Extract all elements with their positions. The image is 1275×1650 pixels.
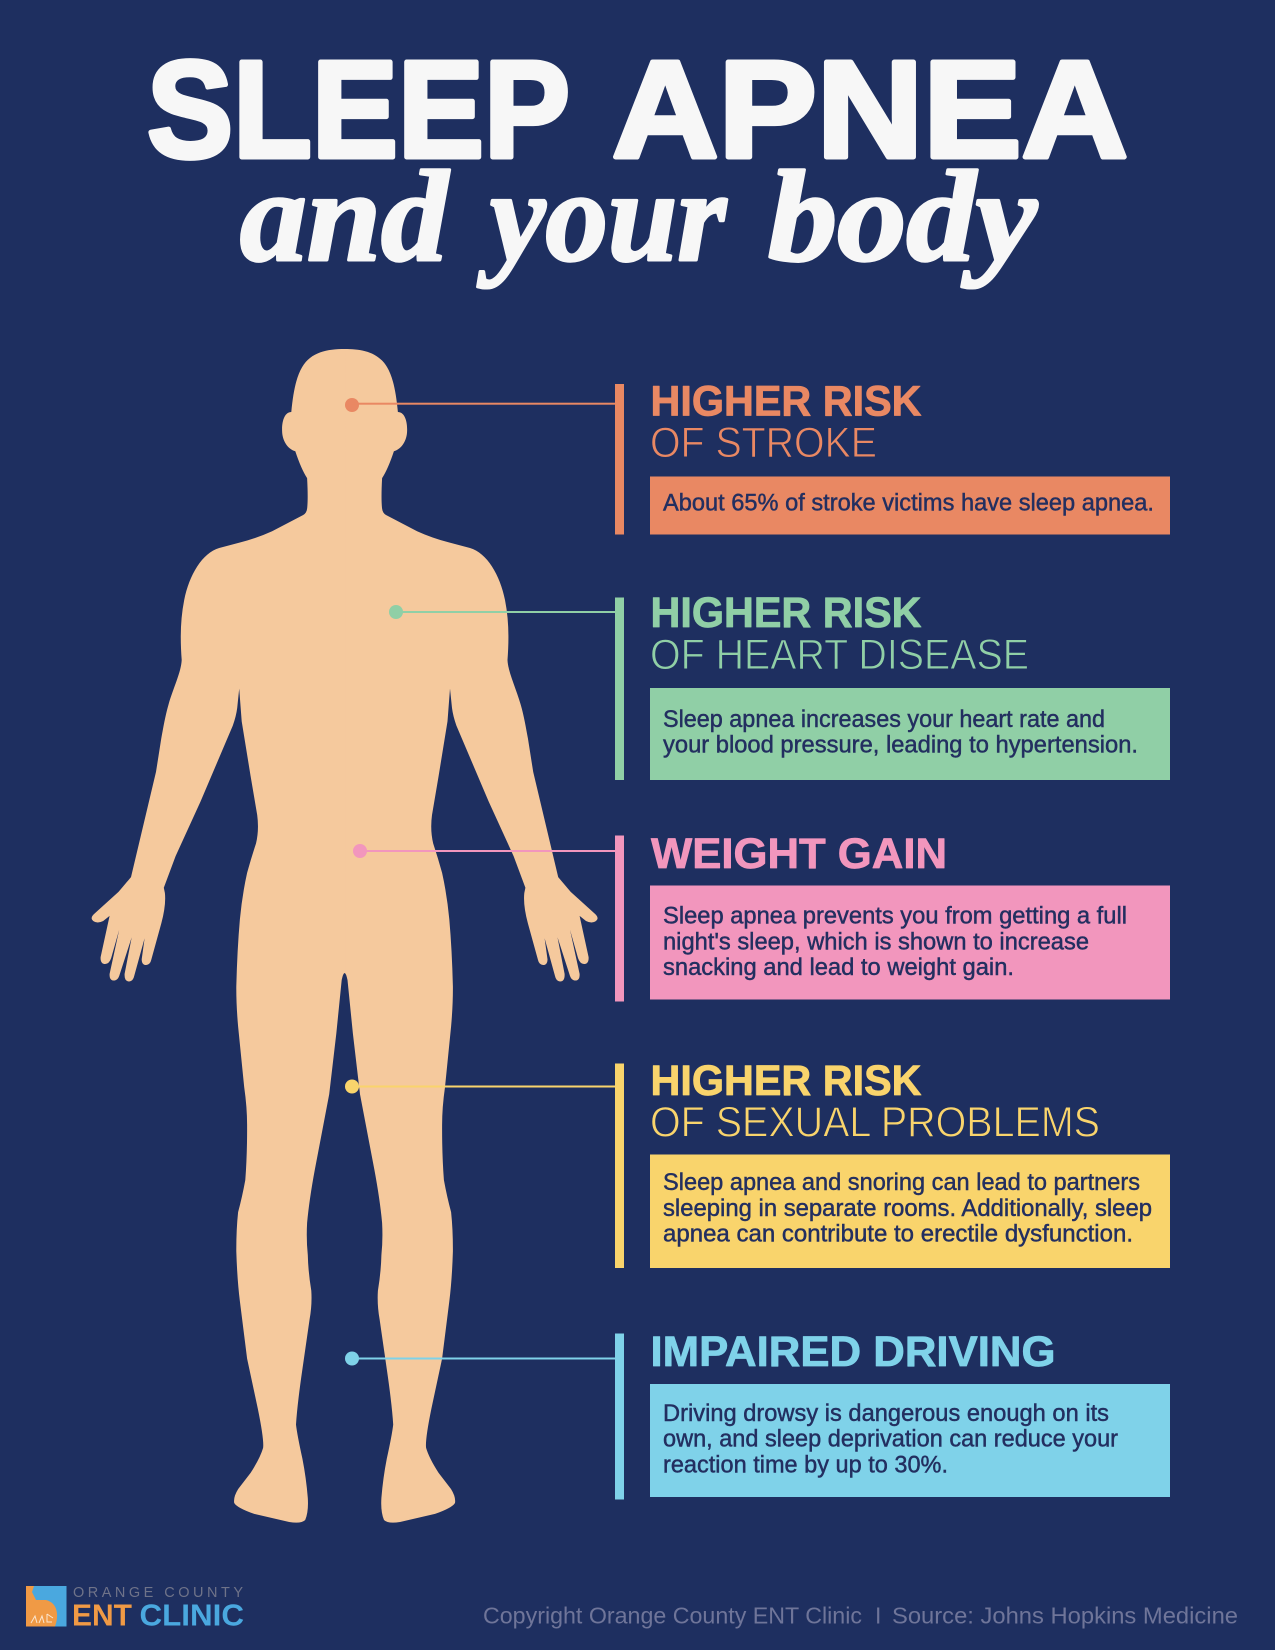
callout: heart disease fact	[650, 688, 1170, 780]
logo text: Clinic: CLINIC	[140, 1599, 244, 1633]
title	[147, 33, 1128, 289]
callout: weight gain fact: night's sleep, which is shown to increase	[663, 929, 1089, 955]
callout: heart disease fact: Sleep apnea increases your heart rate and	[663, 707, 1105, 733]
panel: sexual problems	[345, 1057, 1170, 1268]
callout: stroke fact: About 65% of stroke victims have sleep apnea.	[663, 490, 1154, 516]
human body silhouette	[92, 349, 598, 1523]
connector: shin to impaired driving	[345, 1352, 616, 1366]
accent bar: heart disease	[615, 598, 624, 780]
heading: higher risk of heart disease: OF HEART DISEASE	[650, 631, 1029, 679]
callout: heart disease fact: your blood pressure, leading to hypertension.	[663, 733, 1138, 759]
callout: stroke fact	[650, 476, 1170, 534]
callout: sexual problems fact	[650, 1154, 1170, 1268]
heading: higher risk of heart disease: HIGHER RISK	[650, 589, 922, 637]
title line: and your body	[240, 145, 1038, 289]
heading: impaired driving: IMPAIRED DRIVING	[650, 1328, 1056, 1376]
panel: heart disease	[389, 589, 1170, 780]
connector: abdomen to weight gain	[353, 844, 616, 858]
icon: clinic logo mark	[26, 1586, 66, 1626]
callout: impaired driving fact: Driving drowsy is dangerous enough on its	[663, 1401, 1109, 1427]
callout: weight gain fact	[650, 886, 1170, 1000]
logo text: ENT: ENT	[72, 1599, 132, 1633]
accent bar: stroke	[615, 384, 624, 534]
panel: impaired driving	[345, 1328, 1170, 1500]
title line: and your body: body	[768, 145, 1038, 289]
title line: and your body: your	[477, 145, 727, 289]
heading: higher risk of sexual problems: OF SEXUAL PROBLEMS	[650, 1098, 1100, 1146]
connector: chest to heart disease	[389, 605, 616, 619]
heading: higher risk of stroke	[650, 378, 922, 467]
callout: weight gain fact: snacking and lead to weight gain.	[663, 955, 1014, 981]
accent bar: impaired driving	[615, 1334, 624, 1500]
heading: weight gain: WEIGHT GAIN	[651, 830, 947, 878]
callout: sexual problems fact: Sleep apnea and snoring can lead to partners	[663, 1170, 1140, 1196]
heading: higher risk of sexual problems: HIGHER RISK	[650, 1057, 922, 1105]
heading: higher risk of heart disease	[650, 589, 1029, 679]
callout: sexual problems fact: apnea can contribute to erectile dysfunction.	[663, 1222, 1133, 1248]
callout: sexual problems fact: sleeping in separate rooms. Additionally, sleep	[663, 1196, 1152, 1222]
callout: impaired driving fact	[650, 1384, 1170, 1497]
logo text: Orange County: ORANGE COUNTY	[73, 1585, 243, 1601]
callout: weight gain fact: Sleep apnea prevents you from getting a full	[663, 903, 1127, 929]
connector: head to stroke	[345, 398, 616, 412]
copyright and source line: I	[875, 1602, 881, 1628]
accent bar: sexual problems	[615, 1064, 624, 1268]
title line: and your body: and	[240, 145, 450, 289]
panel: stroke	[345, 378, 1170, 534]
title line: SLEEP APNEA: SLEEP	[147, 33, 570, 187]
title line: SLEEP APNEA: APNEA	[612, 33, 1128, 187]
copyright and source line	[483, 1602, 1238, 1628]
footer logo	[26, 1585, 244, 1633]
heading: higher risk of stroke: OF STROKE	[650, 419, 877, 467]
copyright and source line: Source: Johns Hopkins Medicine	[892, 1602, 1238, 1628]
connector: groin to sexual problems	[345, 1080, 616, 1094]
callout: impaired driving fact: reaction time by up to 30%.	[663, 1453, 948, 1479]
callout: impaired driving fact: own, and sleep deprivation can reduce your	[663, 1427, 1118, 1453]
copyright and source line: Copyright Orange County ENT Clinic	[483, 1602, 862, 1628]
title line: SLEEP APNEA	[147, 33, 1128, 187]
heading: higher risk of stroke: HIGHER RISK	[650, 378, 922, 426]
heading: higher risk of sexual problems	[650, 1057, 1100, 1146]
panel: weight gain	[353, 830, 1170, 1002]
accent bar: weight gain	[615, 836, 624, 1002]
